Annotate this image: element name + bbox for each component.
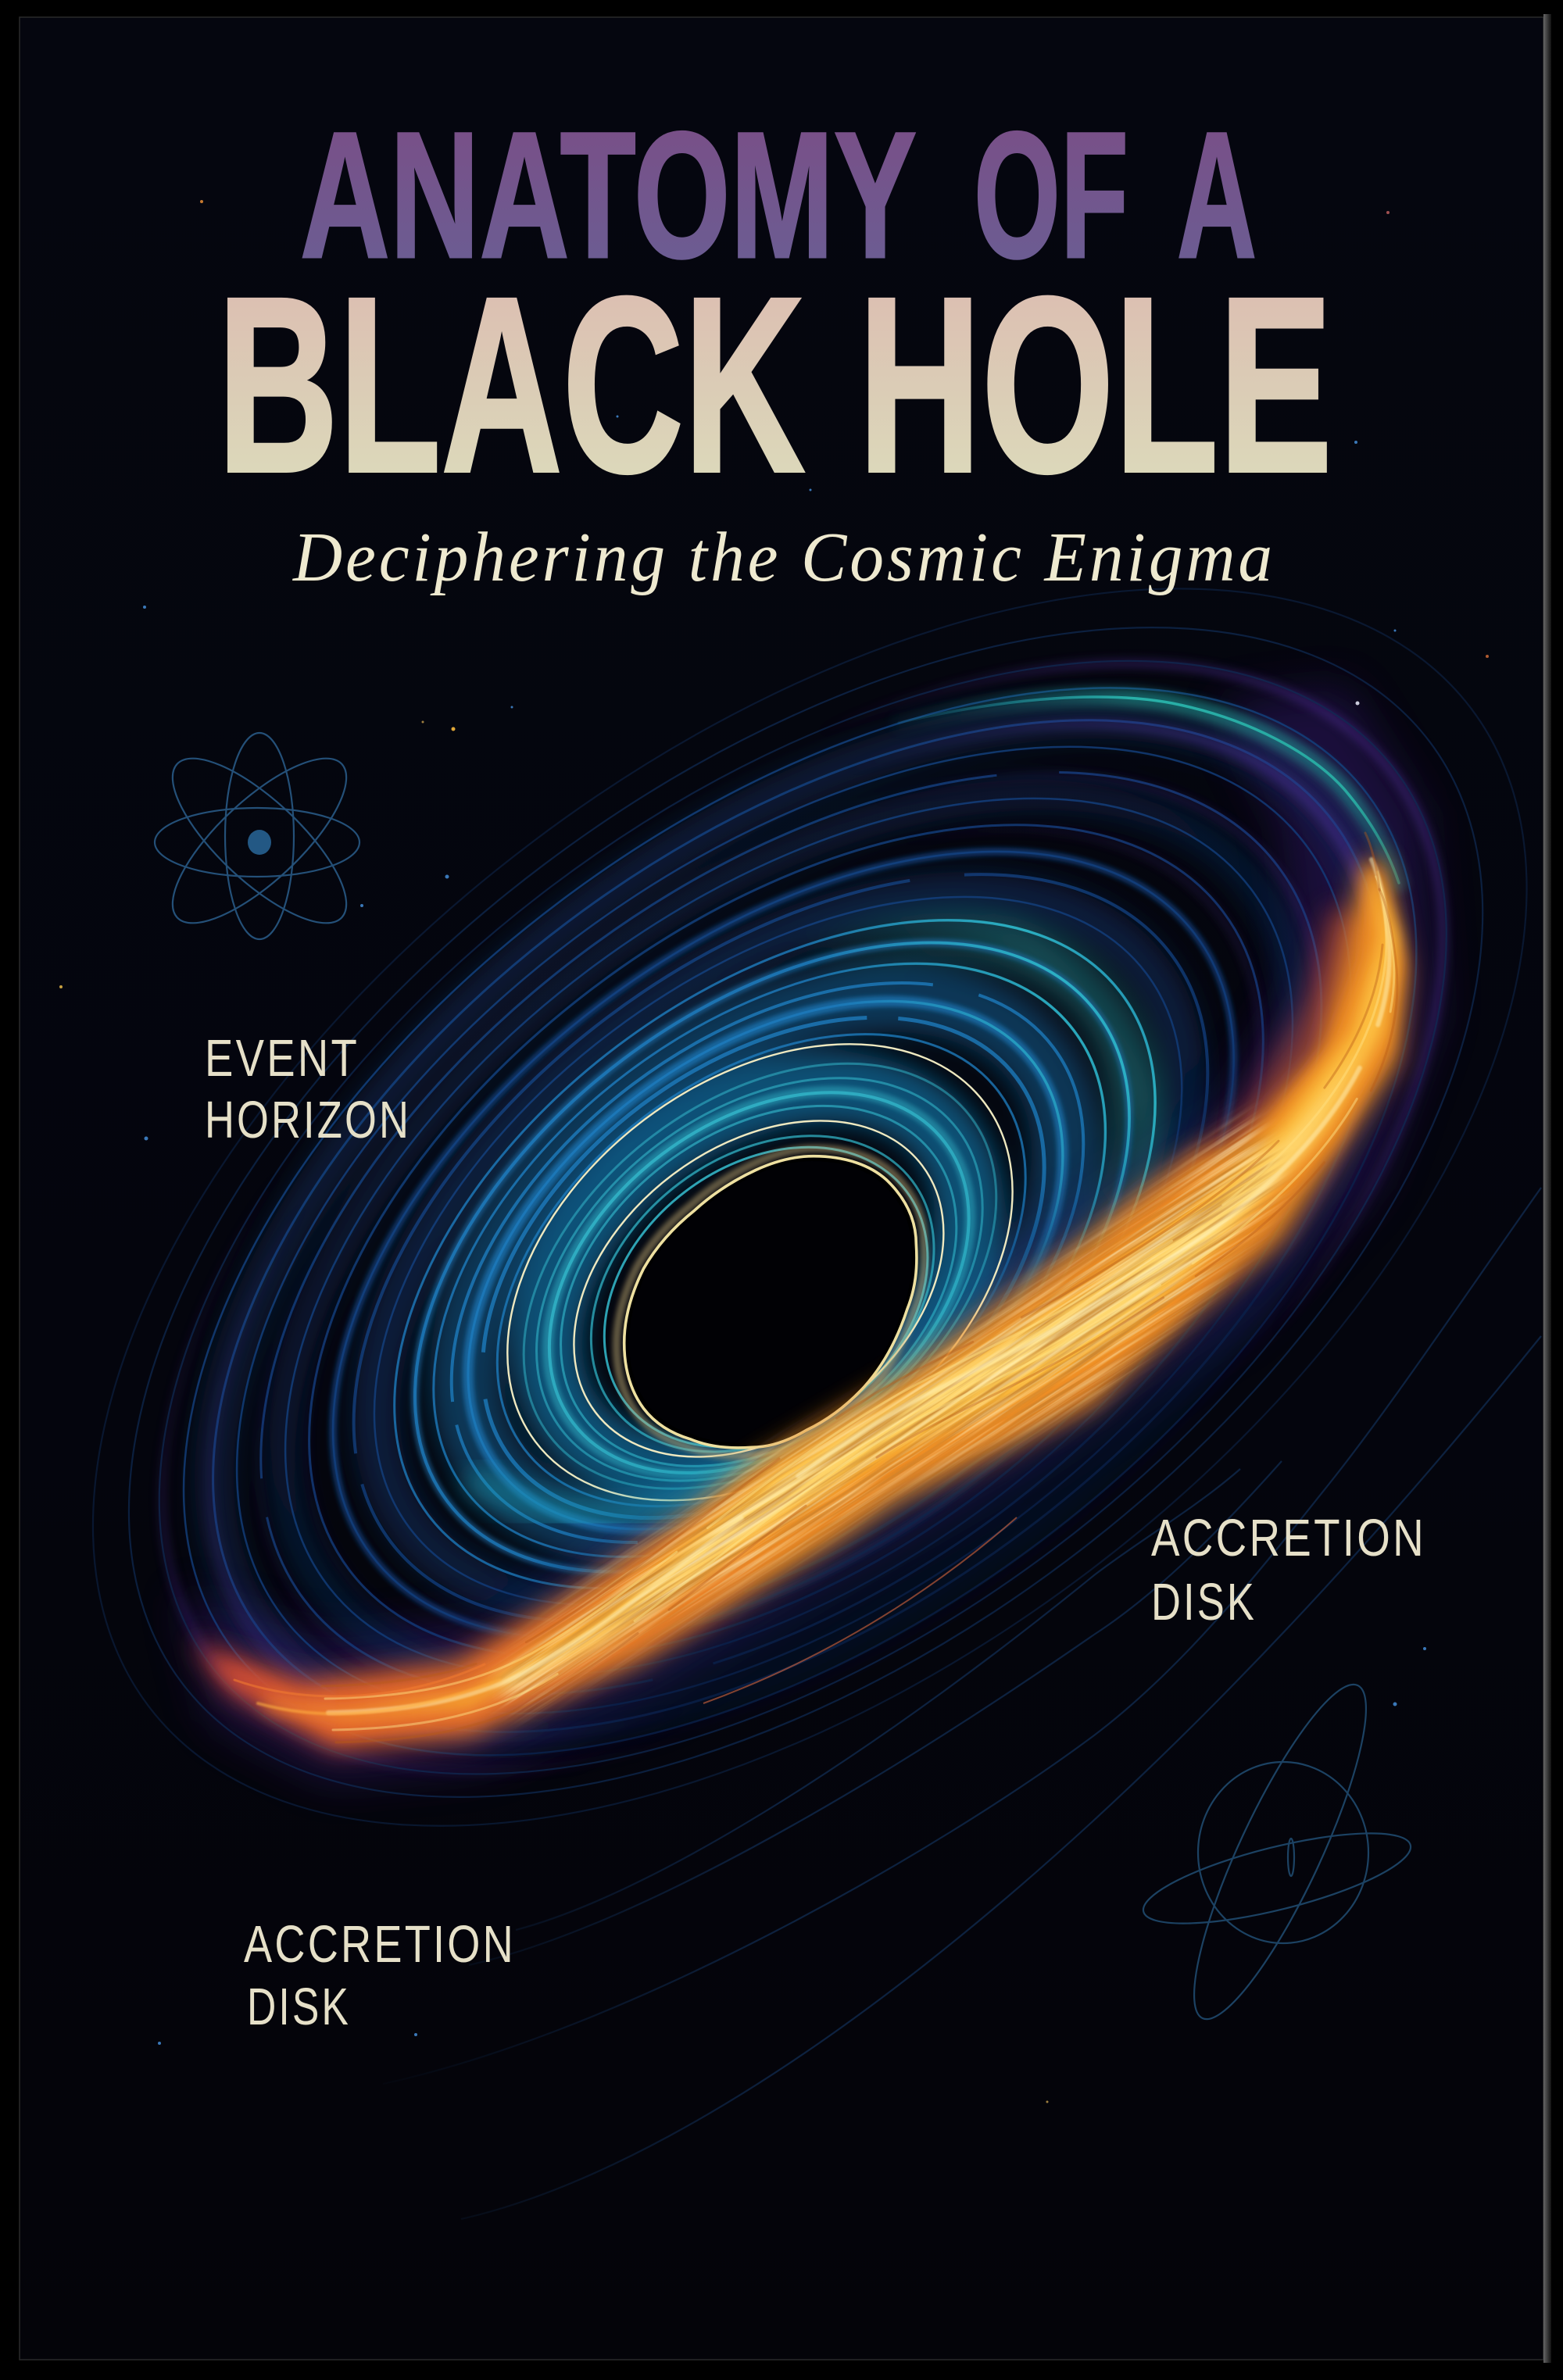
subtitle: Deciphering the Cosmic Enigma: [291, 519, 1275, 596]
teal outer arc at upper right: [899, 697, 1399, 883]
teal glow above band at lower left of the hole: [469, 1469, 766, 1514]
icon: atom: [149, 733, 370, 947]
title line 1: A: [1177, 95, 1257, 295]
title line 1: OF: [974, 95, 1128, 295]
label: event horizon: [205, 1029, 411, 1149]
accretion rings: [92, 588, 1528, 1827]
band streaks: [234, 833, 1397, 1742]
title line 2: BLACK: [217, 245, 805, 524]
label: accretion disk left: DISK: [247, 1978, 351, 2036]
violet ring ends: [0, 442, 1563, 1992]
cream orbit lines: [420, 950, 1100, 1595]
blue mid rings: [271, 784, 1279, 1724]
band fibre texture: [0, 578, 1563, 2235]
label: accretion disk right: [1151, 1509, 1426, 1631]
label: accretion disk right: DISK: [1151, 1573, 1257, 1631]
star field: [59, 200, 1489, 2103]
label: accretion disk right: ACCRETION: [1151, 1509, 1426, 1567]
title line 1: ANATOMY: [300, 95, 917, 295]
label: event horizon: EVENT: [205, 1029, 359, 1088]
icon: planet with orbits: [1136, 1668, 1418, 2035]
label: accretion disk left: ACCRETION: [244, 1915, 516, 1974]
orange-red haze on inner side of the band end: [1125, 914, 1356, 1250]
teal highlights on the right of the mid rings: [271, 784, 1279, 1724]
faint navy outermost rings: [0, 342, 1563, 2072]
thicker soft streak bands: [327, 845, 1240, 1636]
right edge highlight: [1543, 14, 1551, 2363]
violet haze around the disk ends: [180, 688, 1438, 1781]
thin orange arc below band: [703, 1517, 1017, 1703]
label: event horizon: HORIZON: [205, 1091, 411, 1149]
accretion band: orange to yellow crescent: [0, 578, 1563, 2235]
title line 2: HOLE: [858, 245, 1332, 524]
label: accretion disk left: [244, 1915, 516, 2036]
soft blue glow bands: [186, 694, 1377, 1750]
deep blue outer rings: [0, 474, 1563, 1968]
faint lower sweeping lines: [383, 1188, 1541, 2219]
black hole illustration: [92, 588, 1542, 2220]
cyan inner rings: [522, 1063, 997, 1490]
event horizon: [617, 1149, 925, 1456]
